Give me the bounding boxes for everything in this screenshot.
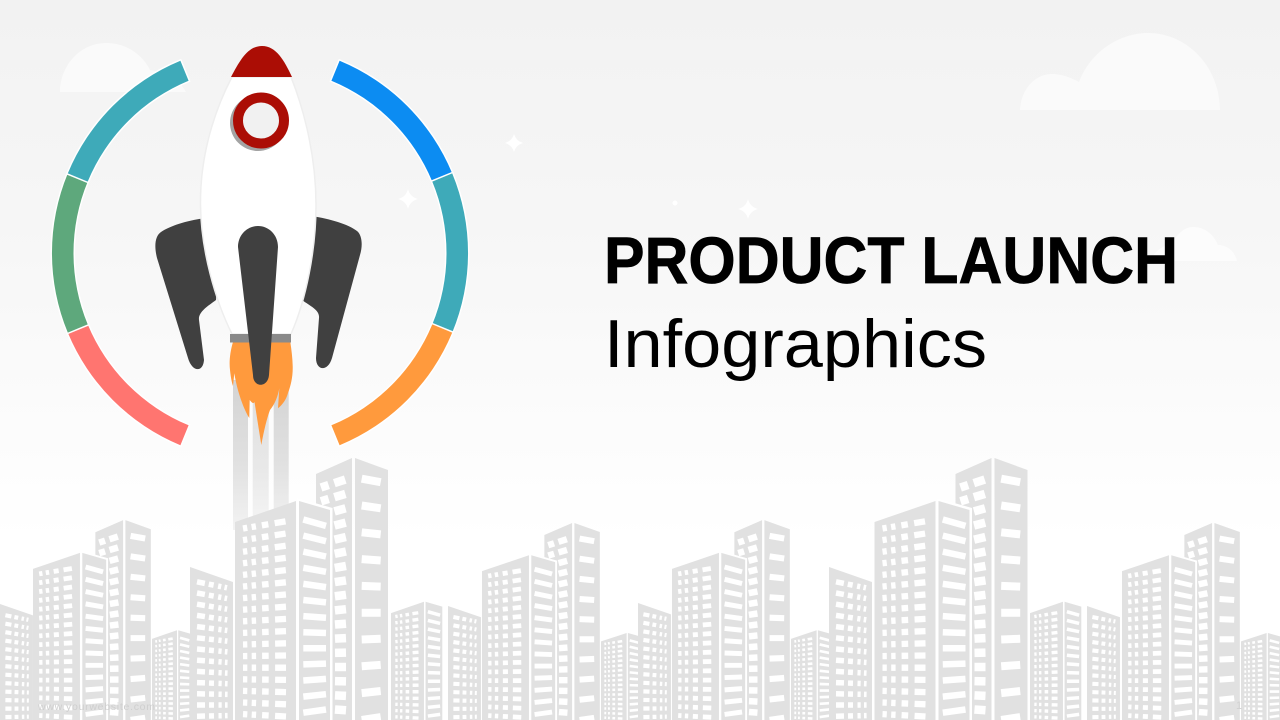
porthole ring [238,98,284,144]
side building centre right [829,567,872,720]
arc: green [52,173,88,333]
page number: 1 [1236,700,1242,712]
arc: blue [331,61,452,182]
side building centre [638,603,671,720]
small building centre right [791,629,832,720]
heading: infographics: Infographics [604,306,987,382]
rocket exhaust trails [233,380,289,530]
cloud: behind title [1150,227,1237,261]
side building next to main tower [190,567,233,720]
footer website: www.yourwebsite.com [37,701,155,713]
title [604,223,1178,382]
tower cluster 2 main [235,458,388,720]
small building right [1030,600,1083,720]
cloud: top left [60,43,186,92]
side building far left [0,604,33,720]
nose cone [231,46,292,77]
tower cluster 5 main [874,458,1028,720]
tower cluster 3 [482,523,600,720]
rocket [155,46,362,445]
nozzle band [230,334,291,342]
left fin [155,218,220,369]
flame [230,342,293,445]
cloud: top right [1020,33,1220,110]
rocket body [200,77,316,334]
porthole shadow [230,95,286,151]
right fin [302,216,362,368]
sparkles [398,134,758,219]
heading: product launch: PRODUCT LAUNCH [604,223,1178,297]
arc: coral [68,324,189,445]
small building centre left [391,600,444,720]
city skyline [0,458,1280,720]
small building far right [1241,632,1280,720]
arc: teal right [432,173,468,333]
tower cluster 4 [672,520,790,720]
tower cluster 6 [1122,523,1240,720]
side building centre left [448,606,481,720]
arc: teal left [68,61,189,182]
centre fin [238,226,278,385]
small building centre [601,632,642,720]
arc: orange [331,324,452,445]
tower cluster 1 [33,520,151,720]
side building right [1087,606,1120,720]
ring of six coloured arc segments [52,61,468,445]
small building group left [152,629,192,720]
